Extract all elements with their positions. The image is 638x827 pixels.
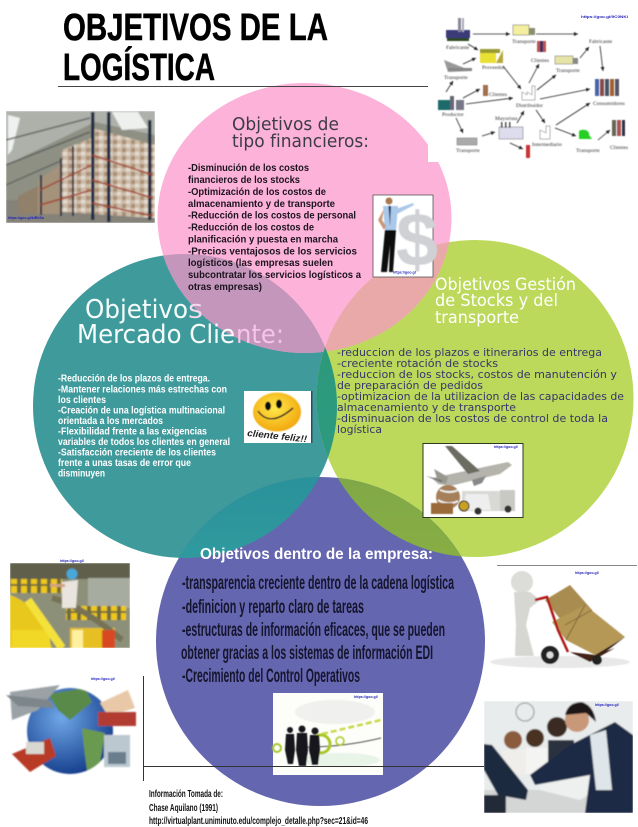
icon: clients [612, 120, 616, 136]
title [63, 7, 328, 89]
title: OBJETIVOS DE LA [63, 7, 328, 49]
network diagram: Fabricante [589, 39, 613, 45]
network image background [428, 0, 638, 162]
icon: client [483, 85, 488, 96]
heading: mercado cliente: Objetivo [85, 295, 188, 325]
network diagram: Clientes [531, 58, 549, 64]
heading: gestión de stocks: Objetivos Gestión [435, 275, 576, 294]
source citation [149, 788, 368, 827]
network diagram: Transporte [512, 39, 536, 45]
source citation: Chase Aquilano (1991) [149, 802, 218, 814]
text: lista empresa: -definicion y reparto claro de tareas [182, 597, 364, 618]
text: lista mercado cliente: -Flexibilidad frente a las exigencias [58, 426, 207, 438]
panel: objetivos gestión de stocks [337, 275, 624, 518]
heading: gestión de stocks [435, 275, 576, 327]
text: lista mercado cliente [58, 374, 230, 480]
text: lista financieros: -Disminución de los costos [188, 162, 309, 174]
photo: man with dollar sign: https://goo.gl [393, 270, 416, 274]
network diagram: Proveedor [482, 65, 505, 71]
network diagram: Mayorista [495, 116, 518, 122]
photo: figure with boxes on hand truck [490, 571, 630, 668]
divider rules [143, 565, 637, 781]
text: lista gestión de stocks: -reduccion de los plazos e itinerarios de entrega [337, 346, 602, 359]
text: lista financieros: planificación y puesta en marcha [188, 234, 338, 246]
photo link: network: https://goo.gl/9C0NKi [581, 15, 628, 19]
network diagram: Consumidores [593, 101, 625, 107]
text: lista gestión de stocks: de preparación de pedidos [337, 379, 483, 392]
network diagram: Intermediario [532, 142, 562, 148]
photo: business team at computer: https://goo.gl/ [595, 703, 619, 707]
text: lista financieros: otras empresas) [188, 281, 262, 293]
network diagram: Distribuidor [516, 103, 543, 109]
heading: financieros: Objetivos de [232, 114, 339, 135]
source citation: http://virtualplant.uniminuto.edu/complejo_detalle.php?sec=21&id=46 [149, 815, 368, 827]
labels: Fabricante [446, 45, 470, 51]
heading: mercado cliente: nte: [236, 320, 284, 350]
panel: objetivos financieros [188, 114, 438, 293]
text: lista mercado cliente: -Satisfacción creciente de los clientes [58, 448, 216, 458]
icon: producer plant [438, 100, 450, 110]
photo: factory line: https://goo.gl/ [60, 559, 84, 563]
text: lista financieros: subcontratar los servicios logísticos a [188, 269, 361, 281]
text: lista gestión de stocks: logística [337, 423, 382, 436]
heading: mercado cliente: Mercado Clie [77, 320, 235, 350]
overlap: mercado and stocks [316, 347, 337, 458]
photo: globe with transport: https://goo.gl/ [91, 677, 115, 681]
icon: consumers [595, 79, 619, 96]
photo: figure with boxes on hand truck: https://goo.gl/ [575, 571, 599, 575]
photo: business team at computer [484, 701, 633, 813]
icon: supplier [480, 53, 496, 63]
photo: factory line [10, 559, 130, 648]
icon: factory [446, 30, 470, 38]
network diagram: Transporte [556, 68, 580, 74]
text: lista financieros: -Optimización de los costos de [188, 186, 326, 198]
icon: truck 2 [555, 56, 573, 64]
title: LOGÍSTICA [63, 45, 215, 89]
network diagram: Transporte [456, 148, 480, 154]
text: lista gestión de stocks: -reduccion de los stocks, costos de manutención y [337, 368, 617, 381]
heading: gestión de stocks: de Stocks y del [435, 291, 558, 310]
icon: plane [444, 60, 472, 72]
network diagram: Clientes [610, 145, 628, 151]
source citation: Información Tomada de: [149, 788, 223, 800]
network diagram: Transporte [444, 75, 468, 81]
text: lista gestión de stocks: -optimizacion de la utilizacion de las capacidades de [337, 390, 624, 403]
photo: business team silhouettes [273, 693, 383, 775]
icon: people client [537, 41, 546, 52]
photo: business team silhouettes: https://goo.gl/ [354, 695, 378, 699]
circle: mercado cliente [33, 254, 337, 558]
network diagram: Transporte [576, 148, 600, 154]
panel: objetivos dentro de la empresa [181, 546, 454, 775]
photo: warehouse [6, 111, 155, 223]
arrows [446, 34, 610, 149]
network diagram: Clientes [489, 92, 507, 98]
text: lista gestión de stocks: -disminuacion de los costos de control de toda la [337, 412, 608, 425]
text: lista mercado cliente: variables de todos los clientes en general [58, 437, 230, 448]
photo: man with dollar sign: $ [396, 198, 438, 283]
photo link: warehouse: https://goo.gl/kIRhSn [8, 216, 44, 220]
icon: wholesaler [499, 127, 523, 139]
icon: tanker [457, 138, 477, 145]
heading: financieros: tipo financieros: [232, 131, 369, 152]
icon: distributor [522, 86, 535, 100]
icon: small person [526, 145, 530, 158]
circle: gestión de stocks [316, 240, 634, 557]
text: lista financieros: -Reducción de los costos de personal [188, 210, 356, 222]
icon: cliente feliz smiley: cliente feliz!! [247, 428, 308, 445]
text: lista mercado cliente: orientada a los mercados [58, 416, 163, 427]
heading: financieros [232, 114, 369, 152]
icon: intermediary [540, 126, 550, 139]
photo: globe with transport [6, 677, 136, 778]
circle: objetivos financieros [158, 83, 452, 353]
text: lista financieros: almacenamiento y de transporte [188, 198, 335, 210]
heading: gestión de stocks: transporte [435, 308, 519, 327]
icon: green truck [579, 130, 592, 139]
text: lista financieros [188, 162, 361, 293]
text: lista financieros: financieros de los stocks [188, 174, 300, 186]
text: lista mercado cliente: -Mantener relaciones más estrechas con [58, 384, 227, 396]
icon: cliente feliz smiley [244, 391, 312, 445]
photo: plane, globe and truck: https://goo.gl/ [494, 445, 518, 449]
photo: plane, globe and truck [423, 444, 523, 518]
header rule [58, 86, 428, 87]
text: lista financieros: -Precios ventajosos de los servicios [188, 246, 357, 258]
text: lista mercado cliente: -Creación de una logística multinacional [58, 406, 225, 416]
text: lista gestión de stocks: almacenamiento y de transporte [337, 401, 516, 414]
text: lista empresa: -Crecimiento del Control Operativos [182, 666, 360, 687]
network diagram: Productor [442, 112, 464, 118]
panel: objetivos mercado cliente [58, 295, 312, 480]
circle: objetivos dentro de la empresa [156, 477, 485, 806]
text: lista gestión de stocks: -creciente rotación de stocks [337, 357, 498, 370]
text: lista mercado cliente: -Reducción de los plazos de entrega. [58, 374, 210, 384]
heading: dentro de la empresa: Objetivos dentro de la empresa: [200, 546, 433, 563]
heading: mercado cliente: s [188, 295, 203, 325]
overlap: financieros and mercado [163, 254, 325, 353]
text: lista gestión de stocks [337, 346, 624, 436]
photo: man with dollar sign [373, 195, 438, 283]
text: lista empresa: obtener gracias a los sistemas de información EDI [181, 643, 433, 664]
text: lista mercado cliente: los clientes [58, 395, 106, 406]
text: lista mercado cliente: disminuyen [58, 468, 105, 480]
heading: mercado cliente [77, 295, 284, 350]
text: lista empresa [181, 573, 454, 687]
text: lista mercado cliente: frente a unas tasas de error que [58, 458, 191, 469]
text: lista financieros: logísticos (las empresas suelen [188, 257, 333, 269]
network diagram [438, 15, 628, 158]
overlap: empresa and stocks [338, 478, 462, 556]
overlap: empresa and mercado [179, 477, 320, 558]
icon: truck [513, 25, 529, 35]
overlap: financieros and stocks [324, 242, 449, 352]
text: lista financieros: -Reducción de los costos de [188, 222, 314, 234]
